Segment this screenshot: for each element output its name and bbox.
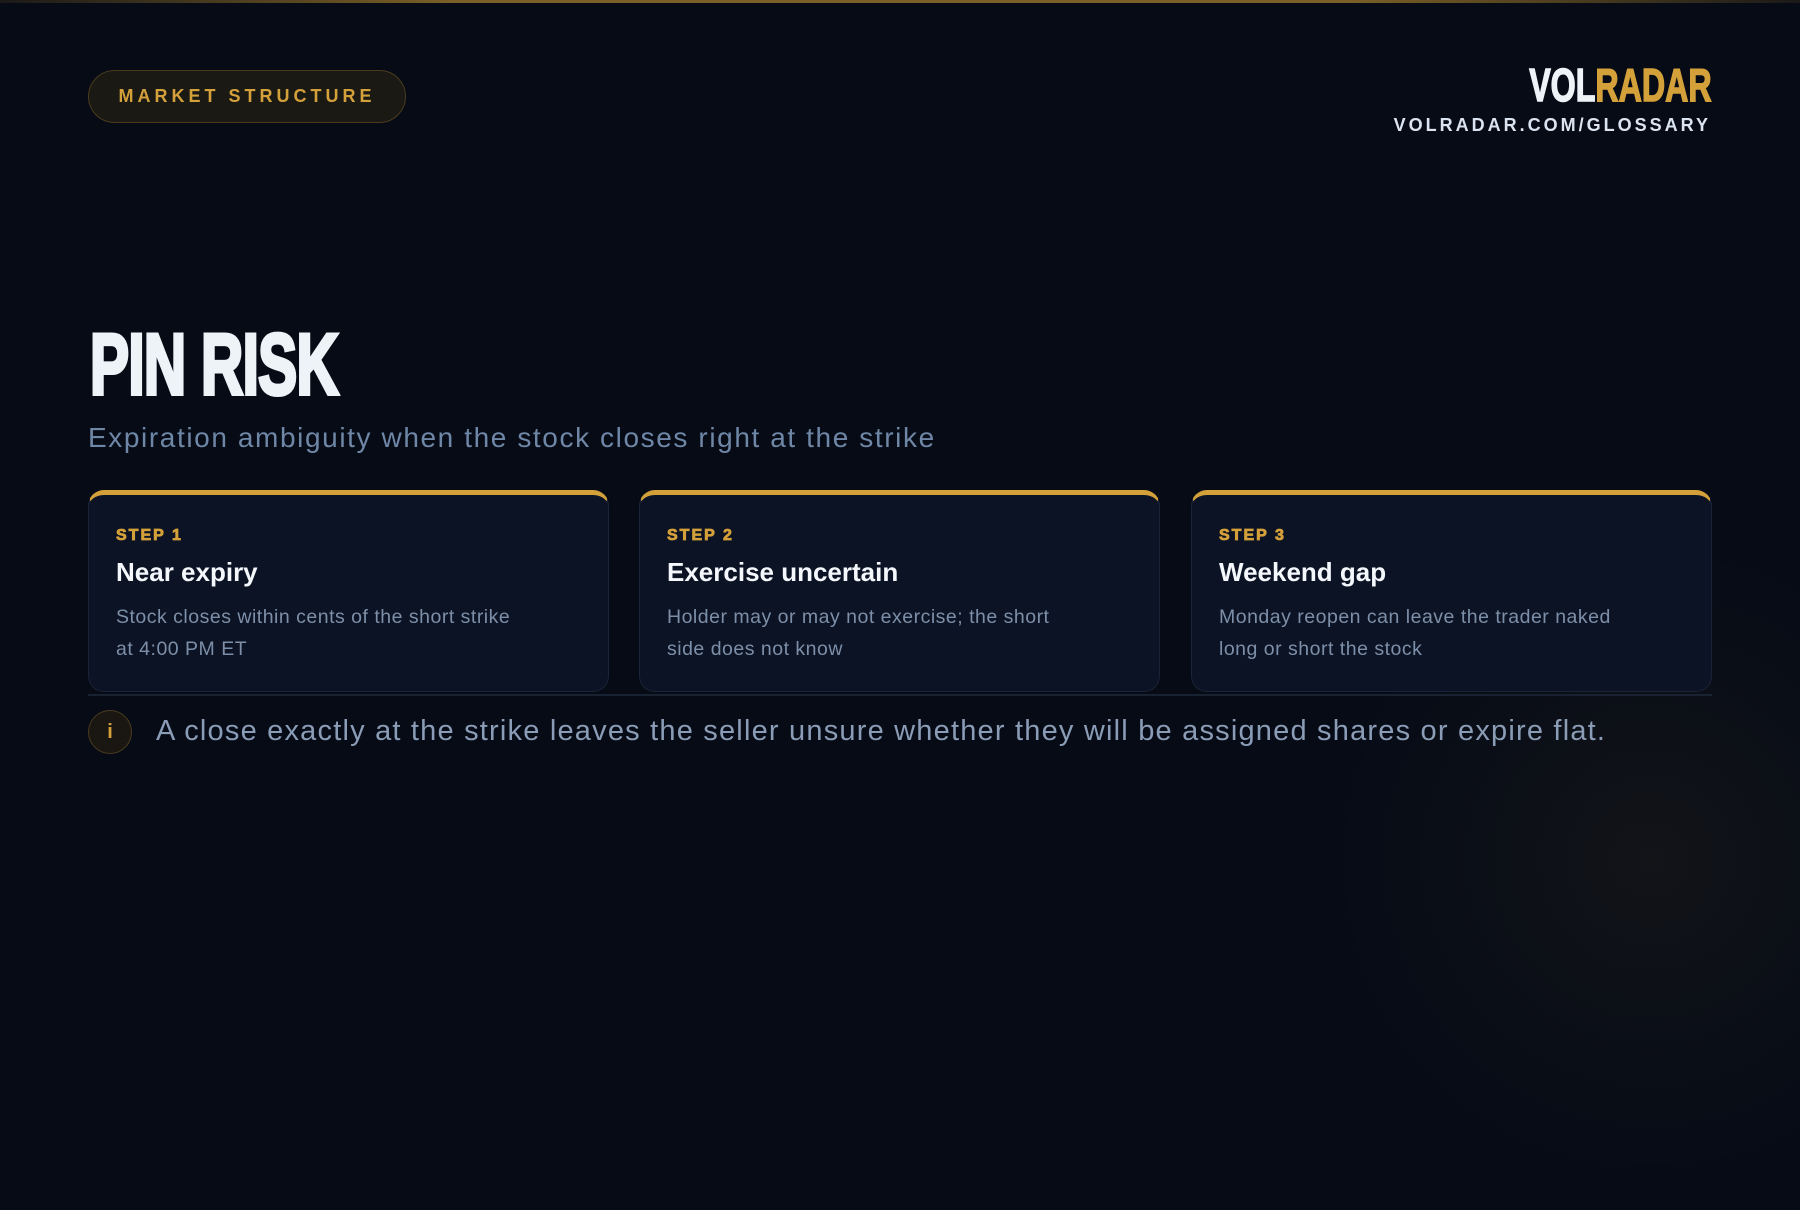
subtitle: Expiration ambiguity when the stock closes right at the strike <box>88 422 936 453</box>
step label: STEP 1 <box>116 527 183 544</box>
title: PIN RISK <box>90 317 338 413</box>
step description: side does not know <box>667 638 843 660</box>
step description: Stock closes within cents of the short strike <box>116 606 510 628</box>
callout text: A close exactly at the strike leaves the seller unsure whether they will be assigned shares or expire flat. <box>156 715 1606 747</box>
url: VOLRADAR.COM/GLOSSARY <box>1394 115 1711 135</box>
logo: VOLRADAR <box>1530 59 1712 111</box>
category pill <box>88 70 406 123</box>
step description: Holder may or may not exercise; the short <box>667 606 1049 628</box>
step description <box>667 606 1049 660</box>
step description <box>1219 606 1611 660</box>
step description: at 4:00 PM ET <box>116 638 247 660</box>
step description <box>116 606 510 660</box>
icon: info: i <box>107 721 113 743</box>
step heading: Near expiry <box>116 557 258 587</box>
callout <box>88 710 1606 754</box>
step heading: Exercise uncertain <box>667 557 898 587</box>
step description: Monday reopen can leave the trader naked <box>1219 606 1611 628</box>
panel: step 2 <box>639 490 1160 692</box>
step label: STEP 3 <box>1219 527 1286 544</box>
step heading: Weekend gap <box>1219 557 1386 587</box>
step description: long or short the stock <box>1219 638 1422 660</box>
step label: STEP 2 <box>667 527 734 544</box>
icon: info <box>88 710 132 754</box>
panel: step 3 <box>1191 490 1712 692</box>
category pill: MARKET STRUCTURE <box>118 86 376 106</box>
panel: step 1 <box>88 490 609 692</box>
